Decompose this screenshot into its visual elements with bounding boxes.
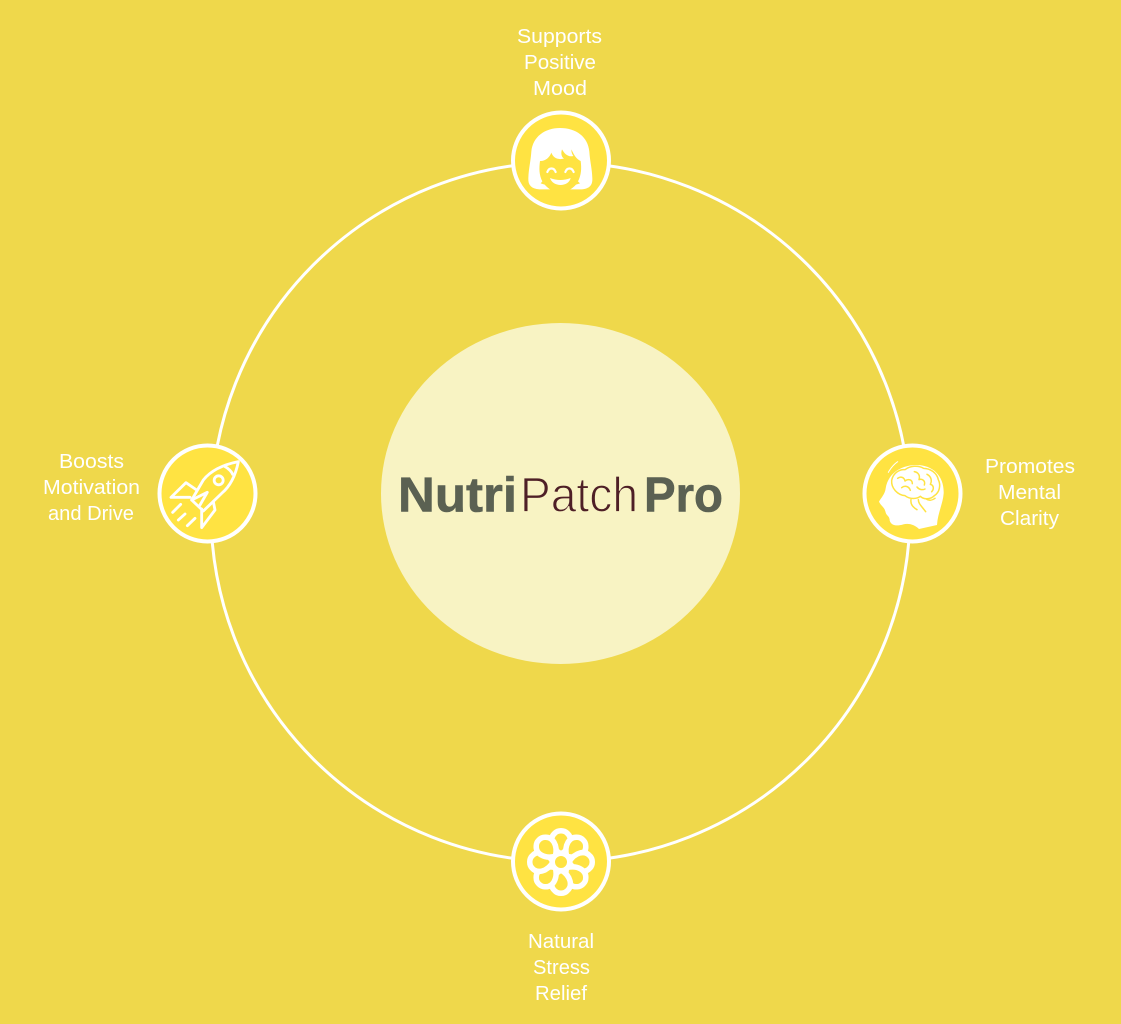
label: natural stress relief: Relief — [535, 983, 587, 1005]
icon: head with brain — [879, 462, 944, 529]
label: supports positive mood: Positive — [524, 52, 596, 74]
logo: NutriPatchPro: Patch — [520, 468, 638, 522]
label: boosts motivation and drive — [43, 451, 140, 525]
icon: rocket — [171, 462, 238, 528]
label: supports positive mood — [517, 26, 602, 100]
label: boosts motivation and drive: and Drive — [48, 503, 134, 525]
label: promotes mental clarity: Mental — [998, 482, 1061, 504]
node: promotes mental clarity — [864, 446, 960, 542]
icon: smiling face — [528, 128, 592, 192]
label: supports positive mood: Mood — [533, 78, 587, 100]
label: promotes mental clarity: Promotes — [985, 456, 1075, 478]
ring connecting benefits — [211, 162, 910, 862]
label: natural stress relief: Stress — [533, 957, 590, 979]
label: promotes mental clarity — [985, 456, 1075, 530]
logo: NutriPatchPro — [398, 468, 723, 522]
label: boosts motivation and drive: Boosts — [59, 451, 124, 473]
label: supports positive mood: Supports — [517, 26, 602, 48]
label: natural stress relief: Natural — [528, 931, 594, 953]
node: boosts motivation and drive — [160, 446, 256, 542]
icon: flower — [530, 831, 592, 893]
logo: NutriPatchPro: Nutri — [398, 468, 517, 522]
logo: NutriPatchPro: Pro — [644, 468, 723, 522]
node: natural stress relief — [513, 814, 609, 910]
label: natural stress relief — [528, 931, 594, 1005]
label: promotes mental clarity: Clarity — [1000, 508, 1059, 530]
node: supports positive mood — [513, 112, 609, 208]
label: boosts motivation and drive: Motivation — [43, 477, 140, 499]
central logo disc — [381, 323, 740, 664]
